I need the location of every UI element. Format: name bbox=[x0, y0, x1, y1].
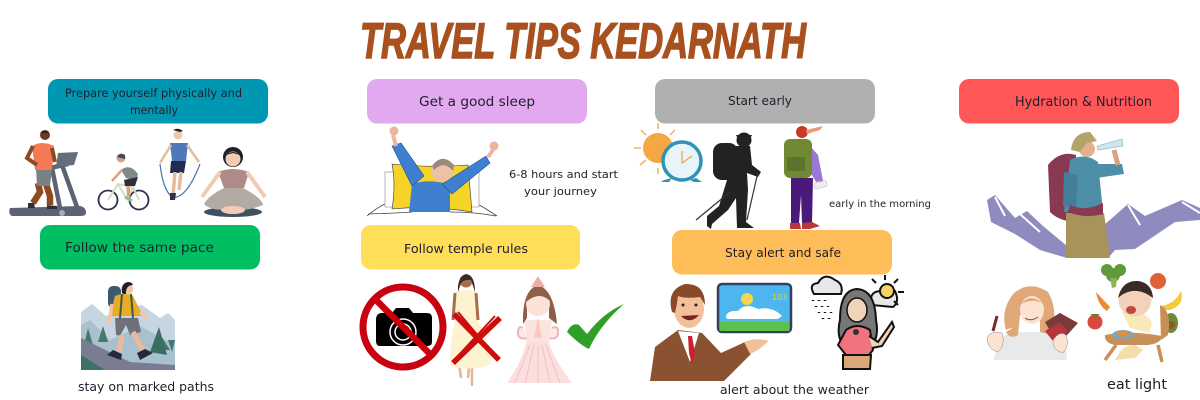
icon: sun and alarm clock bbox=[634, 123, 702, 182]
icon: green check mark bbox=[567, 304, 624, 349]
caption: alert about the weather: alert about the weather bbox=[720, 382, 870, 397]
panel: stay alert and safe heading: Stay alert and safe bbox=[725, 245, 841, 260]
text: 6-8 hours and start your journey: 6-8 hours and start bbox=[509, 168, 619, 181]
icon: woman in sleeveless dress with red cross bbox=[450, 274, 500, 386]
title: TRAVEL TIPS KEDARNATH bbox=[360, 13, 807, 69]
icon: weather display screen bbox=[718, 284, 791, 332]
panel: get a good sleep heading: Get a good sleep bbox=[419, 94, 535, 110]
panel: hydration and nutrition heading: Hydration & Nutrition bbox=[1015, 95, 1152, 110]
icon: girl praying bbox=[507, 276, 572, 383]
icon: no camera sign bbox=[363, 287, 443, 367]
icon: woman eating chocolate bbox=[987, 286, 1078, 360]
panel: follow the same pace heading: Follow the same pace bbox=[65, 240, 214, 256]
icon: hiker drinking water in mountains bbox=[987, 132, 1200, 258]
icon: weather presenter man bbox=[650, 284, 769, 381]
text: 6-8 hours and start your journey bbox=[509, 168, 619, 198]
panel: prepare yourself heading bbox=[48, 79, 268, 124]
panel: stay alert and safe heading bbox=[672, 230, 892, 274]
panel: hydration and nutrition heading bbox=[959, 79, 1179, 124]
icon: hiker silhouette with trekking poles bbox=[696, 132, 761, 229]
panel: follow temple rules heading bbox=[361, 225, 580, 270]
panel: get a good sleep heading bbox=[367, 79, 587, 124]
panel: follow temple rules heading: Follow temple rules bbox=[404, 241, 528, 256]
panel: start early heading: Start early bbox=[728, 94, 792, 108]
panel: prepare yourself heading: Prepare yourself physically and bbox=[65, 86, 242, 100]
icon: man jumping rope bbox=[160, 129, 200, 200]
panel: follow the same pace heading bbox=[40, 225, 260, 270]
icon: cyclist bbox=[98, 154, 148, 210]
icon: baby eating with vegetables and fruit bbox=[1088, 264, 1182, 362]
icon: hiker with green backpack pointing bbox=[784, 126, 828, 229]
panel: prepare yourself heading: mentally bbox=[130, 103, 178, 117]
caption: stay on marked paths: stay on marked paths bbox=[78, 380, 214, 394]
icon: reporter woman with weather symbols bbox=[812, 275, 904, 369]
caption: eat light: eat light bbox=[1107, 377, 1168, 393]
text: 6-8 hours and start your journey: your journey bbox=[524, 185, 598, 198]
icon: man waking up in bed bbox=[367, 126, 498, 216]
icon: woman meditating bbox=[202, 147, 265, 217]
caption: early in the morning: early in the morning bbox=[829, 199, 931, 210]
panel: start early heading bbox=[655, 79, 875, 124]
icon: man on treadmill bbox=[9, 130, 86, 216]
icon: weather display screen: 103 bbox=[772, 293, 787, 302]
icon: hiker in mountains bbox=[81, 282, 175, 370]
